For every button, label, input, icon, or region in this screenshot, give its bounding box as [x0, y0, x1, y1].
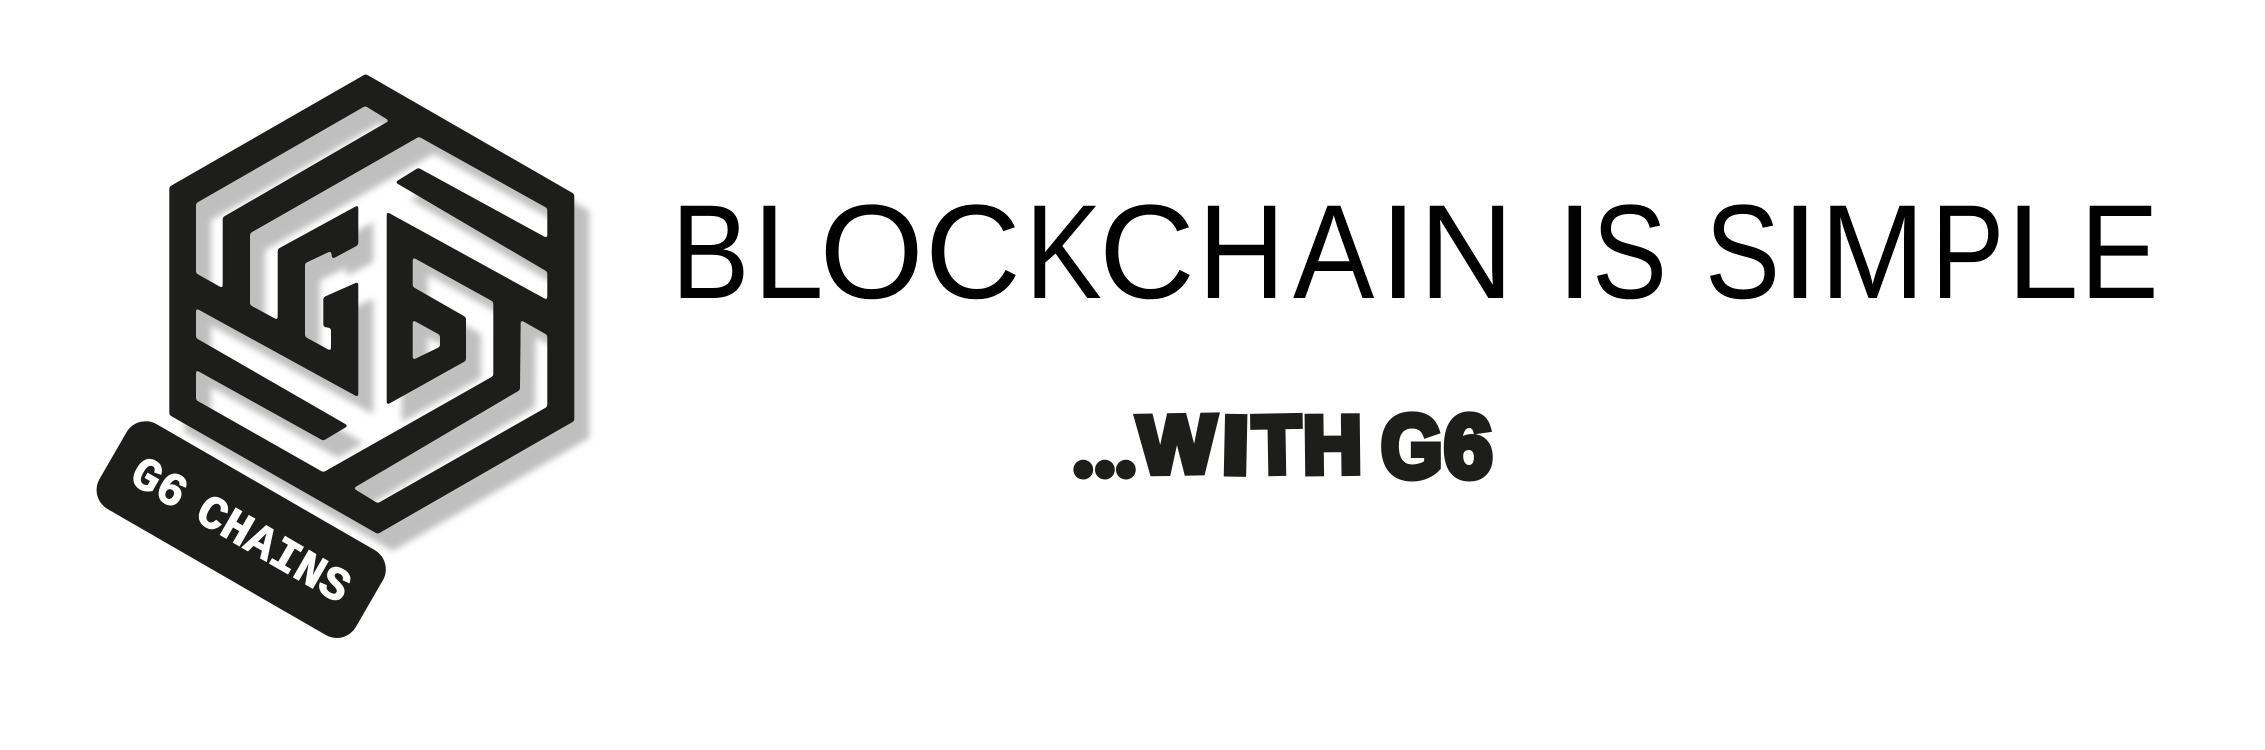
subtitle: ...WITH G6: . — [1068, 370, 1098, 505]
title: BLOCKCHAIN IS SIMPLE: H — [1198, 178, 1285, 327]
title: BLOCKCHAIN IS SIMPLE: C — [925, 178, 1021, 327]
title: BLOCKCHAIN IS SIMPLE: O — [820, 178, 924, 327]
title: BLOCKCHAIN IS SIMPLE: L — [2006, 178, 2078, 327]
title: BLOCKCHAIN IS SIMPLE: K — [1024, 178, 1101, 327]
title: BLOCKCHAIN IS SIMPLE: B — [671, 178, 749, 327]
title: BLOCKCHAIN IS SIMPLE: S — [1592, 178, 1667, 327]
title: BLOCKCHAIN IS SIMPLE — [671, 178, 2159, 327]
subtitle: ...WITH G6: . — [1111, 370, 1141, 505]
title: BLOCKCHAIN IS SIMPLE: C — [1099, 178, 1195, 327]
logo: G6 Chains hexagon with badge — [96, 74, 593, 638]
badge: G6 CHAINS label: G6 CHAINS — [120, 448, 359, 617]
subtitle: ...WITH G6: G — [1381, 396, 1442, 496]
title: BLOCKCHAIN IS SIMPLE: A — [1292, 178, 1374, 327]
title: BLOCKCHAIN IS SIMPLE: M — [1820, 178, 1925, 327]
icon: hexagon drop shadow — [184, 91, 589, 551]
subtitle: ...WITH G6: . — [1090, 370, 1120, 505]
title: BLOCKCHAIN IS SIMPLE: S — [1705, 178, 1780, 327]
title: BLOCKCHAIN IS SIMPLE: N — [1419, 178, 1514, 327]
title: BLOCKCHAIN IS SIMPLE: I — [1556, 178, 1593, 327]
subtitle: ...WITH G6: H — [1303, 400, 1363, 491]
subtitle: ...WITH G6: 6 — [1444, 396, 1493, 496]
title: BLOCKCHAIN IS SIMPLE: I — [1380, 178, 1417, 327]
title: BLOCKCHAIN IS SIMPLE: P — [1931, 178, 2004, 327]
icon: G6 hexagon maze mark — [169, 74, 574, 534]
title: BLOCKCHAIN IS SIMPLE: E — [2080, 178, 2159, 327]
title: BLOCKCHAIN IS SIMPLE: I — [1781, 178, 1819, 327]
title: BLOCKCHAIN IS SIMPLE: L — [753, 178, 824, 327]
subtitle: ...WITH G6: T — [1252, 400, 1301, 491]
subtitle: ...WITH G6 — [1068, 370, 1493, 505]
subtitle: ...WITH G6: I — [1221, 401, 1250, 491]
badge: G6 CHAINS label — [89, 413, 394, 646]
subtitle: ...WITH G6: W — [1137, 400, 1217, 491]
